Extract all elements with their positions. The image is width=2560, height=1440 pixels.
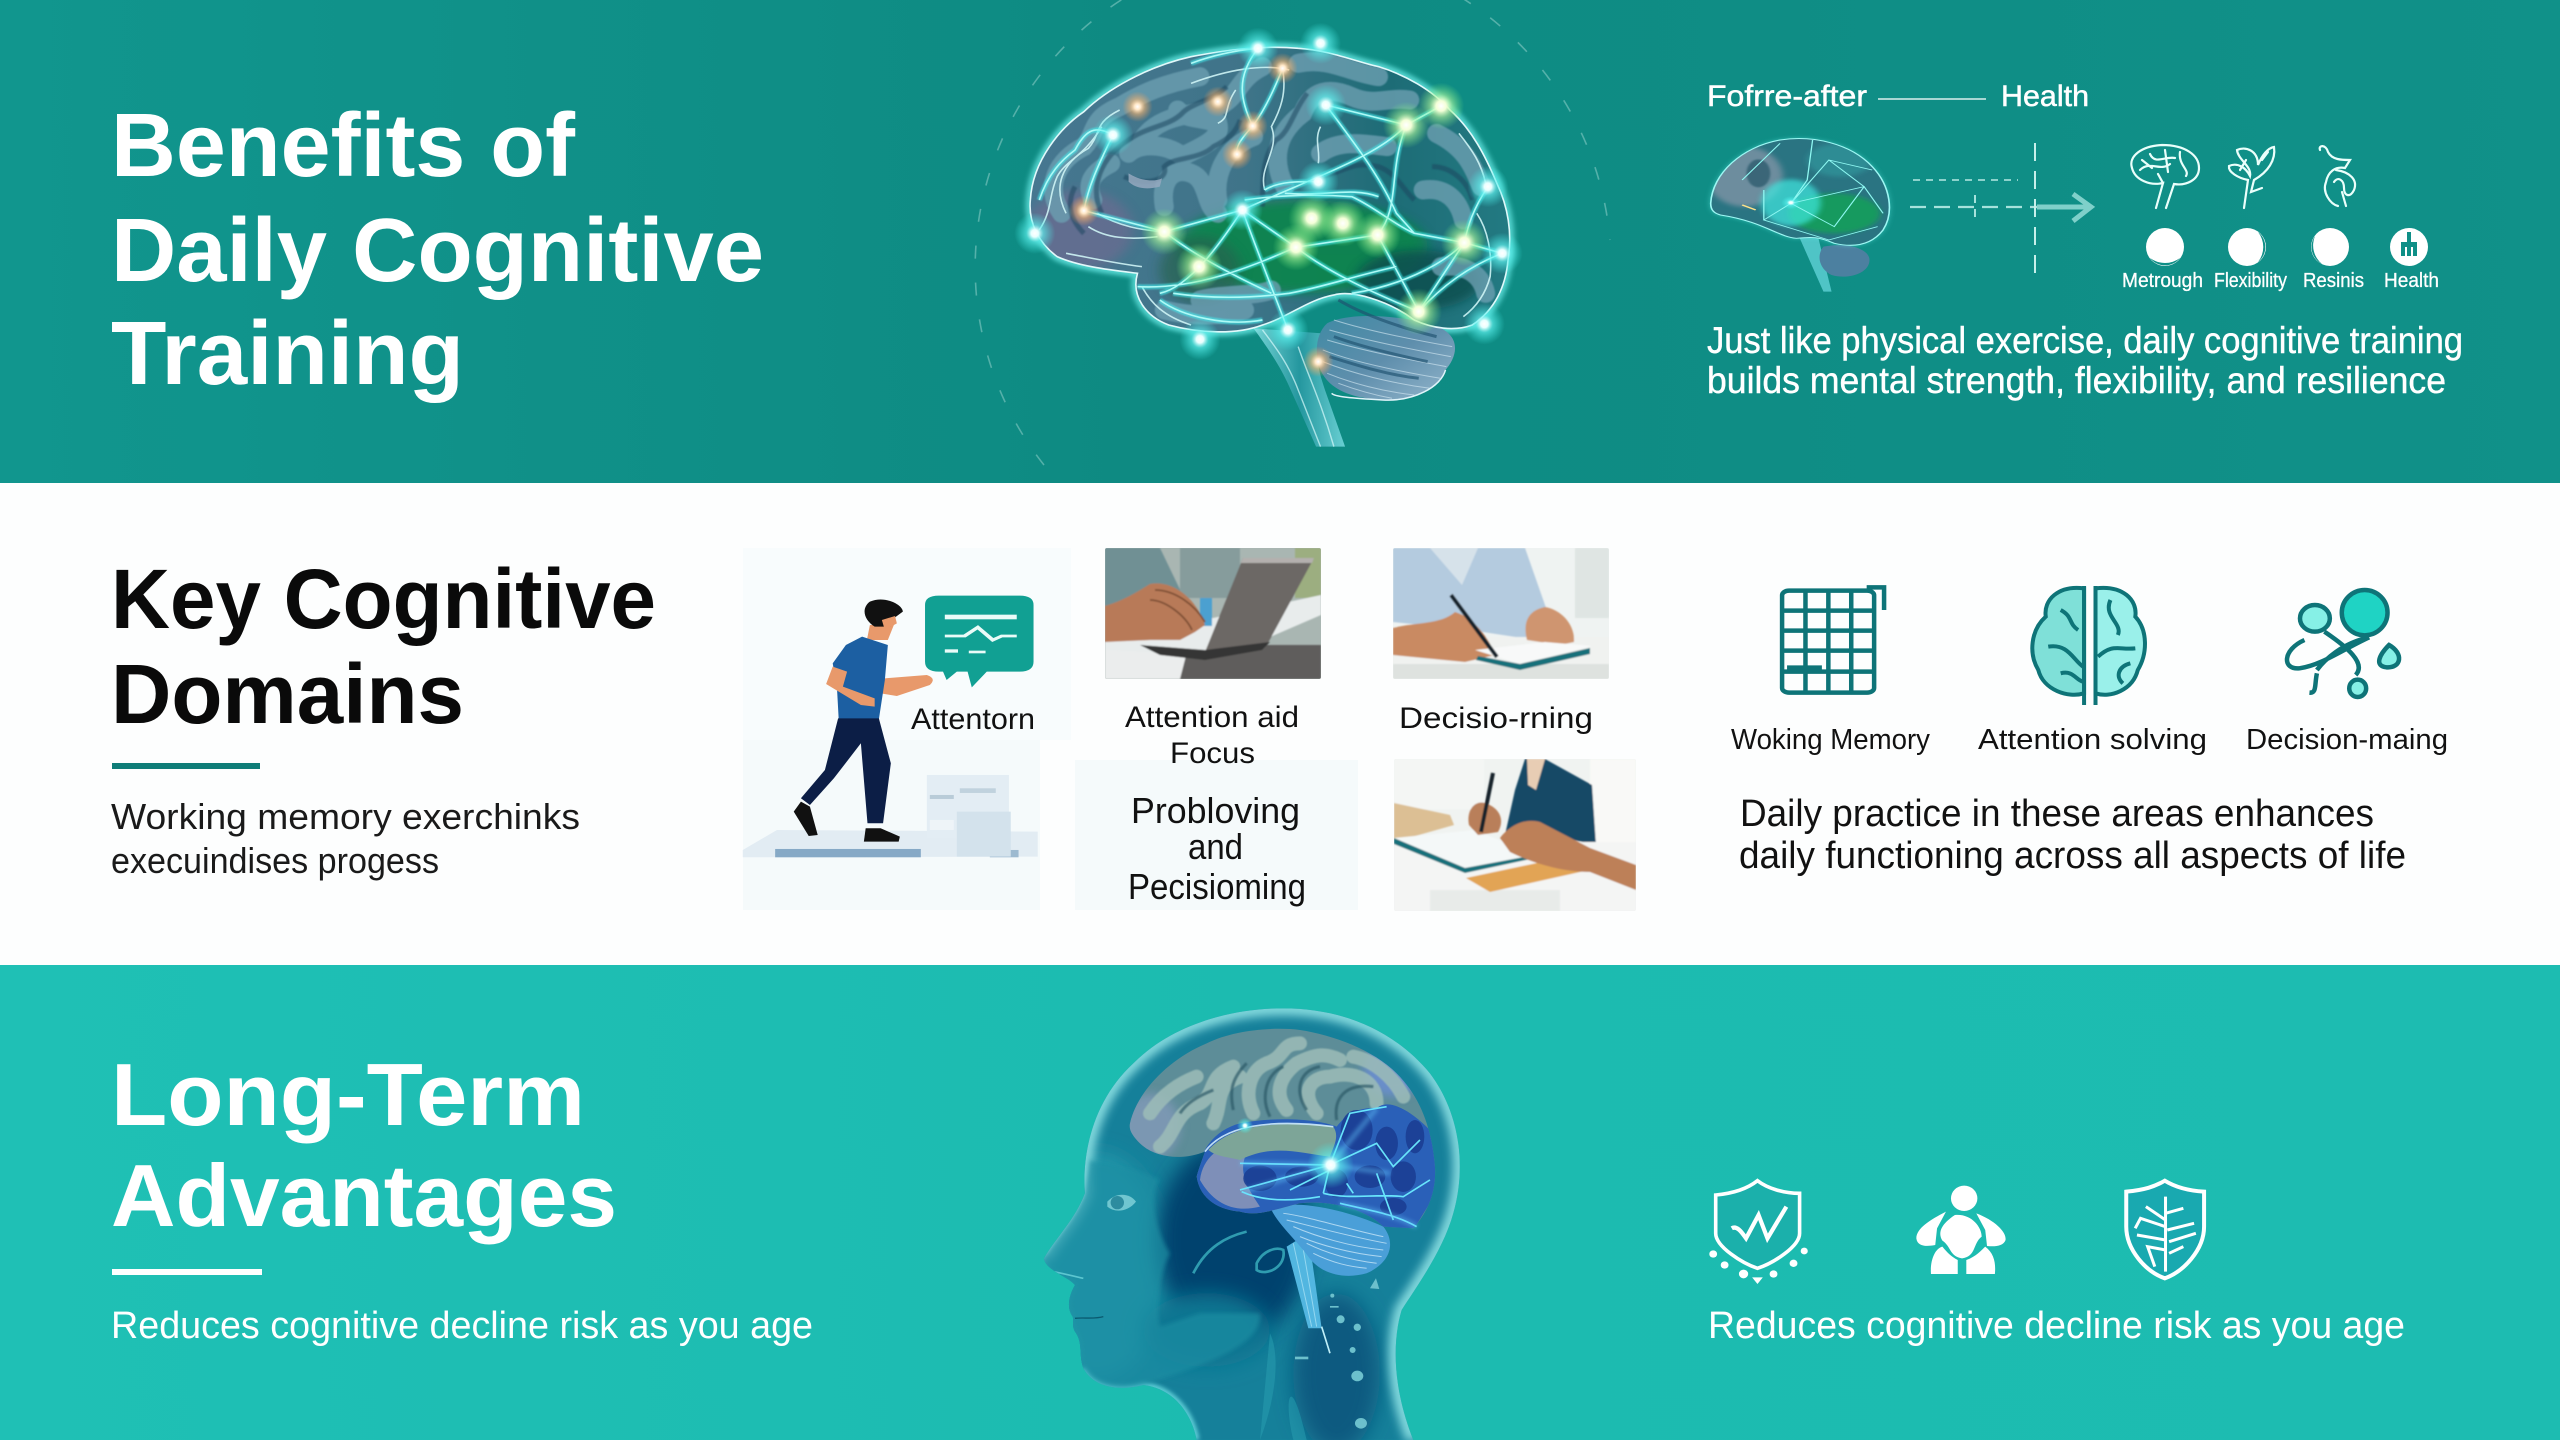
- arrow: before to after: [1910, 143, 2091, 273]
- photo: student writing: [1394, 759, 1636, 911]
- text: reduces decline left: Reduces cognitive decline risk as you age: [111, 1305, 813, 1347]
- icon: figure: [2320, 146, 2355, 206]
- icon: memory grid: [1782, 587, 1884, 693]
- text: daily practice paragraph: daily functioning across all aspects of life: [1739, 835, 2406, 877]
- text: reduces decline right: Reduces cognitive decline risk as you age: [1708, 1305, 2405, 1347]
- text: analogy paragraph: builds mental strength, flexibility, and resilience: [1707, 360, 2446, 401]
- dashed orbit around brain: [975, 0, 1610, 465]
- title: benefits: Daily Cognitive: [111, 201, 764, 301]
- label: attention and focus: Focus: [1170, 737, 1255, 770]
- label: problem solving and decisioning: Probloving: [1131, 790, 1300, 831]
- text: daily practice paragraph: Daily practice in these areas enhances: [1740, 793, 2374, 835]
- person and chat bubble: [743, 596, 1038, 857]
- icon: teal brain: [2032, 586, 2145, 705]
- glowing cortex: [1120, 1029, 1440, 1230]
- photo: hand on laptop: [1105, 548, 1321, 679]
- icon: supportive figures: [1916, 1186, 2006, 1274]
- title: benefits: [111, 96, 764, 404]
- brain stem and cerebellum: [1270, 1205, 1390, 1353]
- illustration: head with brain: [1044, 1008, 1460, 1440]
- label: attention and focus: [1125, 701, 1299, 770]
- heading: key cognitive domains: Domains: [111, 647, 464, 741]
- icon: shield with pulse: [1709, 1181, 1808, 1284]
- panel: key cognitive domains band: [111, 548, 2446, 911]
- photo: writing at desk: [1393, 548, 1609, 679]
- divider: white rule: [112, 1269, 262, 1275]
- metric labels: Flexibility: [2214, 270, 2287, 292]
- text: working memory note: Working memory exerchinks: [111, 796, 580, 837]
- icon: decision nodes: [2287, 590, 2399, 697]
- labels: domain icons: Woking Memory: [1731, 724, 1930, 756]
- card: attention illustration: [743, 548, 1071, 910]
- title: benefits: Training: [111, 304, 464, 404]
- before-after diagram heading: Fofrre-after: [1707, 80, 1867, 113]
- text: analogy paragraph: [1707, 320, 2463, 401]
- title: benefits: Benefits of: [111, 96, 576, 196]
- label: decision making: Decisio-rning: [1399, 702, 1593, 735]
- metric labels: Resinis: [2303, 270, 2364, 292]
- panel: benefits band: [0, 0, 2560, 483]
- card: problem solving: [1075, 760, 1358, 910]
- metric labels: [2122, 270, 2439, 292]
- icon: small brain: [1707, 139, 1889, 292]
- icon: shield with tree: [2126, 1181, 2204, 1278]
- text: working memory note: [111, 796, 580, 881]
- icon: glowing brain: [1014, 23, 1523, 447]
- labels: domain icons: Attention solving: [1978, 724, 2207, 756]
- text: working memory note: execuindises progess: [111, 840, 439, 881]
- metric labels: Metrough: [2122, 270, 2203, 292]
- heading: long-term advantages: [111, 1045, 617, 1245]
- metric badges: [2146, 228, 2428, 266]
- text: daily practice paragraph: [1739, 793, 2406, 877]
- label: attention: Attentorn: [911, 703, 1035, 736]
- heading: long-term advantages: Long-Term: [111, 1045, 585, 1144]
- text: analogy paragraph: Just like physical exercise, daily cognitive training: [1707, 320, 2463, 361]
- heading: long-term advantages: Advantages: [111, 1146, 617, 1245]
- label: problem solving and decisioning: [1128, 790, 1306, 907]
- label: problem solving and decisioning: and: [1188, 826, 1243, 867]
- panel: long-term advantages band: [0, 965, 2560, 1440]
- before-after diagram heading: [1707, 80, 2089, 113]
- labels: domain icons: [1731, 724, 2448, 756]
- divider: teal rule: [112, 763, 260, 769]
- label: attention and focus: Attention aid: [1125, 701, 1299, 734]
- heading: key cognitive domains: [111, 552, 656, 741]
- metric labels: Health: [2384, 270, 2439, 292]
- label: problem solving and decisioning: Pecisioming: [1128, 866, 1306, 907]
- icon: brain outline: [2131, 145, 2199, 208]
- labels: domain icons: Decision-maing: [2246, 724, 2448, 756]
- icon: plant: [2229, 147, 2274, 208]
- heading: key cognitive domains: Key Cognitive: [111, 552, 656, 646]
- before-after diagram heading: Health: [2001, 80, 2089, 113]
